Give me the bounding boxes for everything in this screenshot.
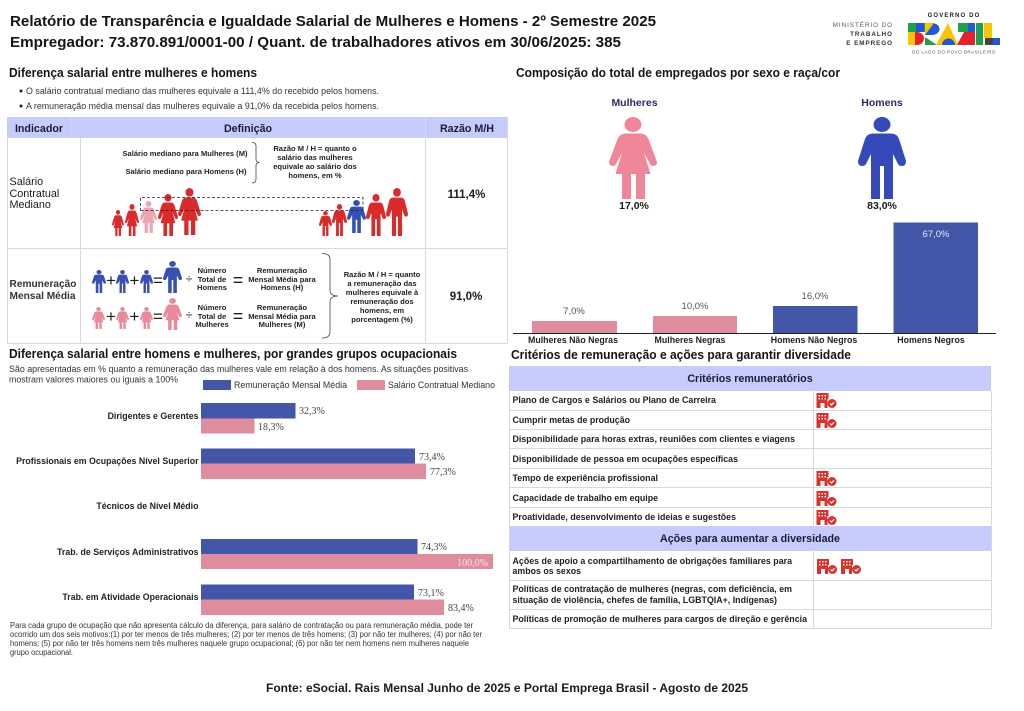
definition: fórmula homens: Homens (H) (261, 283, 304, 292)
title: Empregador: 73.870.891/0001-00 / Quant. de trabalhadores ativos em 30/06/2025: 385 (10, 34, 621, 51)
legend: Remuneração Mensal Média (234, 380, 347, 390)
table header: Indicador (15, 123, 63, 135)
definition: razão remuneração: homens, em (360, 306, 404, 315)
heading: Composição do total de empregados por sexo e raça/cor (516, 66, 840, 80)
category: profissionais nível superior: Profissionais em Ocupações Nível Superior (16, 456, 199, 466)
bar chart: raça/cor: 7,0% (563, 306, 585, 317)
action rows: Políticas de contratação de mulheres (negras, com deficiência, em (512, 584, 792, 594)
text block: nota de rodapé (10, 621, 482, 657)
criteria rows: Proatividade, desenvolvimento de ideias e sugestões (512, 512, 736, 522)
category: dirigentes e gerentes: 18,3% (258, 422, 284, 433)
category: serviços administrativos: 100,0% (457, 558, 488, 569)
definition: fórmula homens: Mensal Média para (248, 275, 317, 284)
icon: mulheres 17,0%: 17,0% (619, 200, 650, 212)
definition: fórmula mulheres: = (233, 306, 243, 326)
category: atividade operacional: 83,4% (448, 603, 474, 614)
legend: Salário Contratual Mediano (388, 380, 495, 390)
definition: fórmula mulheres: Mulheres (195, 320, 229, 329)
icon: mulheres 17,0% (609, 97, 658, 212)
text block: bullets: A remuneração média mensal das mulheres equivale a 91,0% da recebida pelos homens. (26, 101, 379, 111)
row label: salário contratual mediano (10, 176, 59, 211)
icon: homens 83,0% (858, 97, 906, 212)
value: 111,4%: 111,4% (448, 189, 485, 201)
definition: fórmula homens: Total de (198, 275, 226, 284)
criteria rows (512, 395, 795, 522)
section header: critérios remuneratórios: Critérios remuneratórios (687, 373, 813, 385)
text block: explicação: São apresentadas em % quanto a remuneração das mulheres vale em relação à dos homens. As situações positivas (9, 364, 468, 374)
row label: salário contratual mediano: Salário (10, 176, 43, 188)
row label: salário contratual mediano: Mediano (10, 199, 51, 211)
title (10, 13, 656, 51)
definition: salário mediano: Salário mediano para Mulheres (M) (122, 149, 248, 158)
icon: homens 83,0%: 83,0% (867, 200, 898, 212)
icons: two building check marks (817, 559, 861, 574)
bar chart: raça/cor: 10,0% (682, 301, 709, 312)
criteria rows: Disponibilidade para horas extras, reuniões com clientes e viagens (512, 434, 795, 444)
logo: Ministério do Trabalho e Emprego: E EMPREGO (846, 40, 893, 47)
panel: critérios de remuneração e ações (509, 348, 992, 628)
legend (203, 380, 495, 390)
logo: Ministério do Trabalho e Emprego: MINISTÉRIO DO (833, 20, 893, 29)
category: serviços administrativos (57, 539, 493, 569)
category: dirigentes e gerentes (108, 403, 325, 434)
table header: Razão M/H (440, 123, 494, 135)
category: dirigentes e gerentes: 32,3% (299, 406, 325, 417)
definition: fórmula mulheres: = (153, 307, 163, 326)
definition: fórmula mulheres: Total de (198, 312, 226, 321)
logo: Ministério do Trabalho e Emprego (833, 20, 893, 47)
category: atividade operacional (62, 584, 474, 615)
definition: razão remuneração: porcentagem (%) (351, 315, 413, 324)
bar chart: raça/cor: Homens Negros (897, 335, 965, 345)
logo: Governo do Brasil (908, 13, 1000, 54)
definition: razão remuneração: a remuneração das (347, 279, 417, 288)
panel: composição por sexo e raça/cor (513, 66, 996, 345)
definition: salário mediano: salário das mulheres (277, 153, 353, 162)
criteria rows: Disponibilidade de pessoa em ocupações específicas (512, 454, 738, 464)
icon: mulheres 17,0%: Mulheres (611, 97, 658, 109)
bar chart: grupos ocupacionais (16, 403, 493, 615)
definition: fórmula homens (92, 261, 317, 293)
panel: diferença por grandes grupos ocupacionais (9, 347, 495, 657)
definition: fórmula homens: Homens (197, 283, 227, 292)
definition: fórmula homens: + (130, 271, 140, 290)
definition: fórmula mulheres: Mensal Média para (248, 312, 317, 321)
action rows: ambos os sexos (512, 566, 581, 576)
definition: fórmula homens: Número (198, 266, 227, 275)
bar chart: raça/cor (513, 222, 996, 345)
bar chart: raça/cor: Mulheres Não Negras (528, 335, 618, 345)
criteria rows: Cumprir metas de produção (512, 415, 630, 425)
definition: fórmula mulheres: Mulheres (M) (259, 320, 306, 329)
bar chart: raça/cor: 16,0% (802, 291, 829, 302)
bar chart: raça/cor: 67,0% (923, 229, 950, 240)
definition: salário mediano: Salário mediano para Homens (H) (126, 167, 247, 176)
icons: building check marks (816, 393, 836, 525)
action rows: situação de violência, chefes de família, LGBTQIA+, Indígenas) (512, 595, 777, 605)
table header: Definição (224, 123, 273, 135)
definition: fórmula homens: + (106, 271, 116, 290)
table: indicadores (7, 117, 508, 344)
definition: salário mediano: Razão M / H = quanto o (273, 144, 357, 153)
title: Relatório de Transparência e Igualdade Salarial de Mulheres e Homens - 2º Semestre 2025 (10, 13, 656, 30)
bar chart: raça/cor: Mulheres Negras (655, 335, 726, 345)
criteria rows: Tempo de experiência profissional (512, 473, 658, 483)
definition: fórmula mulheres: + (106, 307, 116, 326)
text block: bullets (20, 86, 379, 111)
category: serviços administrativos: 74,3% (421, 542, 447, 553)
row label: remuneração mensal média: Mensal Média (10, 290, 76, 302)
table: critérios (509, 366, 992, 628)
definition: fórmula mulheres: ÷ (186, 308, 193, 322)
action rows: Políticas de promoção de mulheres para cargos de direção e gerência (512, 614, 808, 624)
text block: bullets: O salário contratual mediano das mulheres equivale a 111,4% do recebido pelos homens. (26, 86, 379, 96)
icon: family figures with median highlighted (112, 188, 408, 236)
action rows (512, 556, 808, 624)
category: profissionais nível superior: 73,4% (419, 452, 445, 463)
text block: nota de rodapé: homens; (5) por não ter três homens nem três mulheres naquele grupo ocupacional; (6) por não ter nem homens nem mulheres naquele (10, 639, 470, 648)
heading: Diferença salarial entre mulheres e homens (9, 66, 257, 80)
heading: Critérios de remuneração e ações para garantir diversidade (511, 348, 851, 362)
definition: fórmula homens: = (233, 270, 243, 290)
row label: remuneração mensal média (10, 278, 76, 302)
definition: fórmula homens: Remuneração (257, 266, 307, 275)
action rows: Ações de apoio a compartilhamento de obrigações familiares para (512, 556, 793, 566)
definition: fórmula homens: ÷ (186, 272, 193, 286)
definition: salário mediano: homens, em % (288, 171, 342, 180)
bar chart: raça/cor: Homens Não Negros (771, 335, 857, 345)
definition: razão remuneração: Razão M / H = quanto (344, 270, 421, 279)
definition: fórmula mulheres: Número (198, 303, 227, 312)
row label: salário contratual mediano: Contratual (10, 188, 59, 200)
definition: fórmula mulheres: Remuneração (257, 303, 307, 312)
criteria rows: Plano de Cargos e Salários ou Plano de Carreira (512, 395, 717, 405)
row label: remuneração mensal média: Remuneração (10, 278, 76, 290)
category: atividade operacional: 73,1% (418, 588, 444, 599)
value: 91,0%: 91,0% (450, 291, 482, 303)
definition: razão remuneração: mulheres equivale à (346, 288, 419, 297)
criteria rows: Capacidade de trabalho em equipe (512, 493, 658, 503)
definition: razão remuneração (322, 254, 421, 338)
definition: salário mediano: equivale ao salário dos (273, 162, 357, 171)
logo: Governo do Brasil: GOVERNO DO (928, 13, 980, 19)
definition: fórmula mulheres (92, 298, 317, 330)
text block: explicação: mostram valores maiores ou iguais a 100% (9, 374, 178, 384)
text block: nota de rodapé: grupo ocupacional. (10, 648, 73, 657)
logo: Ministério do Trabalho e Emprego: TRABALHO (850, 31, 893, 38)
category: serviços administrativos: Trab. de Serviços Administrativos (57, 547, 199, 557)
heading: Diferença salarial entre homens e mulheres, por grandes grupos ocupacionais (9, 347, 457, 361)
text block: nota de rodapé: ocorrido um dos seis motivos:(1) por ter menos de três mulheres; (2) por ter menos de três homens; (3) por não ter mulheres; (4) por não ter (10, 630, 482, 639)
category: profissionais nível superior: 77,3% (430, 467, 456, 478)
definition: fórmula homens: = (153, 271, 163, 290)
table header (15, 123, 494, 135)
definition: fórmula mulheres: + (130, 307, 140, 326)
icon: homens 83,0%: Homens (861, 97, 903, 109)
panel: diferença salarial entre mulheres e homens (9, 66, 379, 111)
section header: ações para aumentar a diversidade: Ações para aumentar a diversidade (660, 533, 840, 545)
text block: nota de rodapé: Para cada grupo de ocupação que não apresenta cálculo da diferença, para salário de contratação ou para remuneração média, pode ter (10, 621, 473, 630)
category: dirigentes e gerentes: Dirigentes e Gerentes (108, 411, 199, 421)
definition: razão remuneração: remuneração dos (350, 297, 414, 306)
definition: salário mediano (122, 142, 357, 183)
category: profissionais nível superior (16, 448, 456, 479)
category: técnicos de nível médio: Técnicos de Nível Médio (96, 501, 199, 511)
source line: Fonte: eSocial. Rais Mensal Junho de 2025 e Portal Emprega Brasil - Agosto de 2025 (266, 683, 749, 695)
text block: explicação (9, 364, 468, 384)
logo: Governo do Brasil: DO LADO DO POVO BRASILEIRO (912, 50, 996, 54)
category: atividade operacional: Trab. em Atividade Operacionais (62, 592, 199, 602)
